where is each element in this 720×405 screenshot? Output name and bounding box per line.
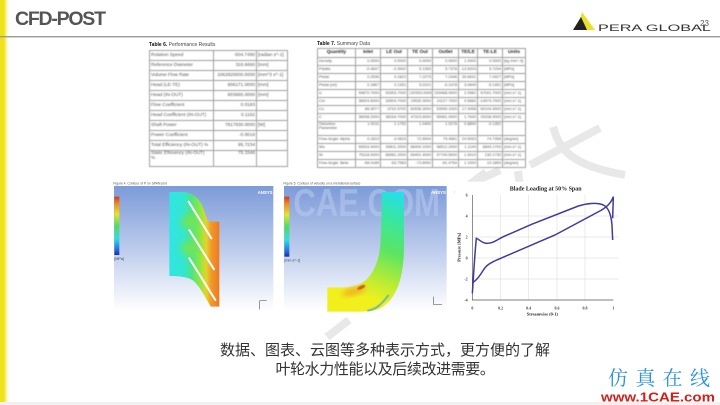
watermark site url: www.1CAE.com xyxy=(600,390,715,404)
table 7: summary data: 0.1822 xyxy=(394,74,406,79)
table 7: summary data: Density xyxy=(319,58,332,63)
y axis labels xyxy=(464,192,468,302)
table 6: performance results: [radian s^-1] xyxy=(258,52,284,57)
table 7: summary data: -13.5203 xyxy=(461,66,476,71)
table 7: summary data: Parameter xyxy=(319,125,337,130)
table 7: summary data: 38164.7000 xyxy=(385,114,406,119)
table 7: summary data: Pstatic xyxy=(319,66,331,71)
table 7: summary data: 1.1000 xyxy=(464,160,476,165)
logo: Pera Global xyxy=(573,12,711,34)
table 6: performance results: 0.1162 xyxy=(241,112,255,117)
table 7: summary data: [mm s^-1] xyxy=(504,114,521,119)
background watermark strokes xyxy=(327,127,625,337)
table 7: summary data: 72.6544 xyxy=(417,136,431,141)
table 7: summary data: [MPa] xyxy=(504,82,514,87)
table 6 caption: Table 6. Performance Results xyxy=(149,42,215,48)
table 7: summary data: 1.0000 xyxy=(464,58,476,63)
table 7: summary data: 24.5053 xyxy=(462,136,476,141)
table 7: summary data: C xyxy=(319,114,322,119)
table 6: performance results: Power Coefficient xyxy=(151,132,188,137)
table 7: summary data: 0.5660 xyxy=(464,98,476,103)
table 7: summary data: 0.1810 xyxy=(367,136,379,141)
table 6: performance results: 806171.0000 xyxy=(228,82,255,87)
figure 1 ANSYS mark: ANSYS xyxy=(258,190,273,195)
x axis labels: 0.4 xyxy=(526,305,531,310)
table 7: summary data: 36924.6000 xyxy=(358,98,379,103)
table 7: summary data: U xyxy=(319,90,322,95)
blade 1 xyxy=(189,202,211,238)
table 6: performance results: Head (LE-TE) xyxy=(151,82,180,87)
table 7: summary data: 0.1867 xyxy=(367,82,379,87)
table 7: summary data: -14974.7000 xyxy=(479,98,501,103)
table 7: summary data: -0.3942 xyxy=(393,66,406,71)
figure 2: meridional contour xyxy=(283,181,447,312)
figure 1 blade passage xyxy=(169,192,219,307)
table 6: performance results: [mm] xyxy=(258,92,268,97)
chart grid xyxy=(472,195,618,300)
table 7: summary data: 74.7358 xyxy=(487,136,501,141)
table 7: summary data: 0.0000 xyxy=(367,58,379,63)
figure 2 caption: Figure 5. Contour of velocity on a meridional surface xyxy=(283,182,361,186)
page number: 23 xyxy=(700,19,709,28)
figure 2 background xyxy=(284,186,447,311)
left yellow strip xyxy=(0,0,10,405)
table 7: summary data: LE Out xyxy=(386,50,402,55)
table 7: summary data: 59533.4000 xyxy=(358,144,379,149)
table 6: performance results: -0.0019 xyxy=(239,132,255,137)
table 7: summary data: Wu xyxy=(319,144,325,149)
table 6: performance results: Flow Coefficient xyxy=(151,102,184,107)
table 7: summary data: 5.0101 xyxy=(419,82,431,87)
table 6: performance results: Rotation Speed xyxy=(151,52,183,57)
table 7: summary data: 7.0427 xyxy=(489,74,501,79)
table 7: summary data: [MPa] xyxy=(504,74,514,79)
x axis labels: 1 xyxy=(612,305,614,310)
figure 1 legend xyxy=(114,197,124,261)
table 7: summary data: 36938.2000 xyxy=(358,114,379,119)
table 7: summary data: [mm s^-1] xyxy=(504,144,521,149)
chart panel xyxy=(455,182,622,322)
x axis labels: 0 xyxy=(471,305,473,310)
hot spot xyxy=(341,285,367,298)
table 7: summary data: 34504.7000 xyxy=(385,98,406,103)
suction side curve xyxy=(473,197,613,282)
table 7: summary data: 130.1730 xyxy=(485,152,501,157)
table 6: performance results: [mm] xyxy=(258,82,268,87)
y axis labels: 4 xyxy=(466,213,468,218)
y axis title: Pressure [MPa] xyxy=(457,232,462,262)
figure 1: blade pressure contour xyxy=(113,182,273,311)
low speed outer wall xyxy=(367,295,389,311)
table 7: summary data: 75.4581 xyxy=(443,136,457,141)
table 6: performance results: 1062820000.0000 xyxy=(217,72,255,77)
table 7: summary data: 5.7378 xyxy=(445,66,457,71)
x axis labels: 0.6 xyxy=(555,305,559,310)
chart title: Blade Loading at 50% Span xyxy=(510,186,582,192)
table 7: summary data: 0.2536 xyxy=(367,74,379,79)
title: CFD-POST xyxy=(15,8,106,30)
table 7: summary data: 66981.2000 xyxy=(385,152,406,157)
table 6: performance results: % xyxy=(151,155,155,160)
table 7: summary data: 10.1859 xyxy=(487,160,501,165)
table 7: summary data: 99870.7000 xyxy=(358,90,379,95)
table 7: summary data: 98512.2000 xyxy=(436,144,457,149)
table 6: performance results: Reference Diameter xyxy=(151,62,193,67)
table 7: summary data: 47319.6000 xyxy=(410,114,431,119)
table 7: summary data: 97749.5000 xyxy=(436,152,457,157)
chart: blade loading xyxy=(455,182,622,322)
table 7 caption: Table 7. Summary Data xyxy=(317,41,370,47)
table 7: summary data: 60536.3000 xyxy=(410,106,431,111)
table 7: summary data: Outlet xyxy=(439,50,452,55)
table 7: summary data: 5.1350 xyxy=(419,66,431,71)
table 7: summary data: 0.0000 xyxy=(419,58,431,63)
figure 1 axis triad xyxy=(260,301,267,309)
table 7: summary data: [mm s^-1] xyxy=(504,98,521,103)
table 6: performance results: 95.7234 xyxy=(238,142,255,147)
table 7: summary data: -5.1451 xyxy=(488,82,501,87)
x axis labels: 0.2 xyxy=(498,305,503,310)
y axis labels: 2 xyxy=(466,234,468,239)
figure 2 legend: [mm s^-1] xyxy=(284,259,300,263)
table 7: summary data: W xyxy=(319,152,323,157)
table 7: summary data: 66490.1000 xyxy=(410,144,431,149)
table 7: summary data: Flow Angle: Alpha xyxy=(319,136,350,141)
green zones between blades xyxy=(181,214,199,256)
table 7: summary data: 1.0019 xyxy=(464,152,476,157)
table 7: summary data: 75118.0000 xyxy=(359,152,379,157)
table 7: summary data: Ptotal xyxy=(319,74,329,79)
figure 1 legend: [MPa] xyxy=(114,257,124,261)
table 7: summary data: 29158.9000 xyxy=(480,114,501,119)
table 7: summary data: 5.7294 xyxy=(489,66,501,71)
table 7: summary data: Quantity xyxy=(327,50,346,55)
bottom band xyxy=(0,402,720,405)
table 7: summary data: 0.1351 xyxy=(394,82,406,87)
x axis labels xyxy=(471,305,614,310)
table 7: summary data: TE/LE xyxy=(461,50,475,55)
table 7: summary data: [degree] xyxy=(504,136,518,141)
table 6: performance results xyxy=(148,50,288,168)
table 7: summary data: [kg mm^-3] xyxy=(504,58,523,63)
table 7: summary data: 2.0582 xyxy=(464,90,476,95)
table 7: summary data: -0.4647 xyxy=(366,66,379,71)
table 7: summary data: 6849.1700 xyxy=(483,144,501,149)
table 7: summary data: -0.1478 xyxy=(444,82,457,87)
blade 2 xyxy=(189,230,214,269)
table 7: summary data: 53945.1000 xyxy=(436,106,457,111)
table 7: summary data: Inlet xyxy=(363,50,373,55)
table 6: performance results: [mm^3 s^-1] xyxy=(258,72,283,77)
table 7: summary data: -81.4754 xyxy=(442,160,457,165)
table 7: summary data: 0.0000 xyxy=(489,58,501,63)
table 7: summary data: 60194.3000 xyxy=(480,106,501,111)
table 7: summary data: -63.7583 xyxy=(391,160,406,165)
table 7: summary data: 130393.0000 xyxy=(409,90,432,95)
x axis title: Streamwise (0-1) xyxy=(527,312,558,317)
figure 2 axis triad xyxy=(434,297,442,305)
conclusion text: 叶轮水力性能以及后续改进需要。 xyxy=(275,361,494,378)
watermark site name: 仿真在线 xyxy=(608,362,710,391)
table 6: performance results: 7817930.0000 xyxy=(225,122,255,127)
conclusion text xyxy=(220,342,550,378)
table 7: summary data: Ptotal (rel) xyxy=(319,82,337,87)
table 7: summary data: 14127.7000 xyxy=(436,98,457,103)
y axis labels: -2 xyxy=(464,276,468,281)
table 7: summary data: Flow Angle: Beta xyxy=(319,160,348,165)
table 7: summary data: 159468.0000 xyxy=(434,90,457,95)
conclusion text: 数据、图表、云图等多种表示方式，更方便的了解 xyxy=(220,342,550,359)
table 6: performance results: Head Coefficient (IN-OUT) xyxy=(151,112,206,117)
table 7: summary data: -58.0185 xyxy=(364,160,379,165)
table 7: summary data: 0.0000 xyxy=(445,58,457,63)
table 6: performance results: 316.6660 xyxy=(235,62,255,67)
figure 2 legend xyxy=(284,197,300,263)
table 7: summary data: [MPa] xyxy=(504,66,514,71)
table 7: summary data: [mm s^-1] xyxy=(504,90,521,95)
figure 1 caption: Figure 4. Contour of P on SPAN plot xyxy=(113,182,167,186)
table 7: summary data: 7.2275 xyxy=(419,74,431,79)
table 7: summary data: TE-LE xyxy=(483,50,497,55)
logo triangle yellow xyxy=(577,12,595,30)
logo triangle black xyxy=(573,17,587,30)
table 7: summary data: 7.2446 xyxy=(445,74,457,79)
table 7: summary data: 19530.3000 xyxy=(410,98,431,103)
table 7: summary data: [mm s^-1] xyxy=(504,106,521,111)
table 6: performance results: Head (IN-OUT) xyxy=(151,92,183,97)
table 7: summary data: Cm xyxy=(319,98,325,103)
table 7: summary data: 1.7640 xyxy=(464,114,476,119)
table 7: summary data: 59811.2000 xyxy=(386,144,406,149)
table 6: performance results: [mm] xyxy=(258,62,268,67)
table 7: summary data: [mm s^-1] xyxy=(504,152,521,157)
blade 3 xyxy=(189,258,215,300)
table 7: summary data: 17.0058 xyxy=(462,106,476,111)
y axis labels: 6 xyxy=(466,192,468,197)
table 7: summary data: [degree] xyxy=(504,160,518,165)
figure 2 flow channel xyxy=(327,192,404,312)
figure 2 ANSYS mark: ANSYS xyxy=(431,190,446,195)
table 7: summary data: 55981.0000 xyxy=(436,114,457,119)
figure 1 background xyxy=(114,186,273,311)
table 7: summary data: 67041.7000 xyxy=(480,90,501,95)
pressure side curve xyxy=(472,203,613,293)
table 7: summary data: 63353.7000 xyxy=(385,90,406,95)
logo wordmark: PERA GLOBAL xyxy=(598,23,711,34)
table 7: summary data: -73.8992 xyxy=(416,160,431,165)
table 7: summary data xyxy=(316,48,526,168)
figure 2 watermark text: CAE.COM xyxy=(293,181,440,225)
table 7: summary data: Units xyxy=(508,50,520,55)
table 7: summary data: 88.3077 xyxy=(365,106,379,111)
table 6: performance results: [W] xyxy=(258,122,265,127)
table 6: performance results: -504.7490 xyxy=(234,52,255,57)
table 7: summary data: 3.0849 xyxy=(464,82,476,87)
table 7: summary data: -3742.5700 xyxy=(386,106,406,111)
table 6: performance results: Volume Flow Rate xyxy=(151,72,189,77)
header rule xyxy=(0,36,720,37)
table 6: performance results: Shaft Power xyxy=(151,122,177,127)
table 6: performance results: 803665.0000 xyxy=(228,92,255,97)
table 7: summary data: -3.0815 xyxy=(393,136,406,141)
table 7: summary data: TE Out xyxy=(412,50,428,55)
table 7: summary data: 1.1149 xyxy=(464,144,476,149)
y axis labels: -4 xyxy=(464,297,468,302)
table 6: performance results: 0.0183 xyxy=(241,102,255,107)
table 6: performance results: Total Efficiency (IN-OUT) % xyxy=(151,142,208,147)
chart axes xyxy=(472,195,613,300)
table 7: summary data: Cu xyxy=(319,106,324,111)
table 7: summary data: 39.6631 xyxy=(462,74,476,79)
table 7: summary data: 69491.4000 xyxy=(410,152,431,157)
y axis labels: 0 xyxy=(466,255,468,260)
x axis labels: 0.8 xyxy=(583,305,587,310)
table 7: summary data: 0.0000 xyxy=(394,58,406,63)
